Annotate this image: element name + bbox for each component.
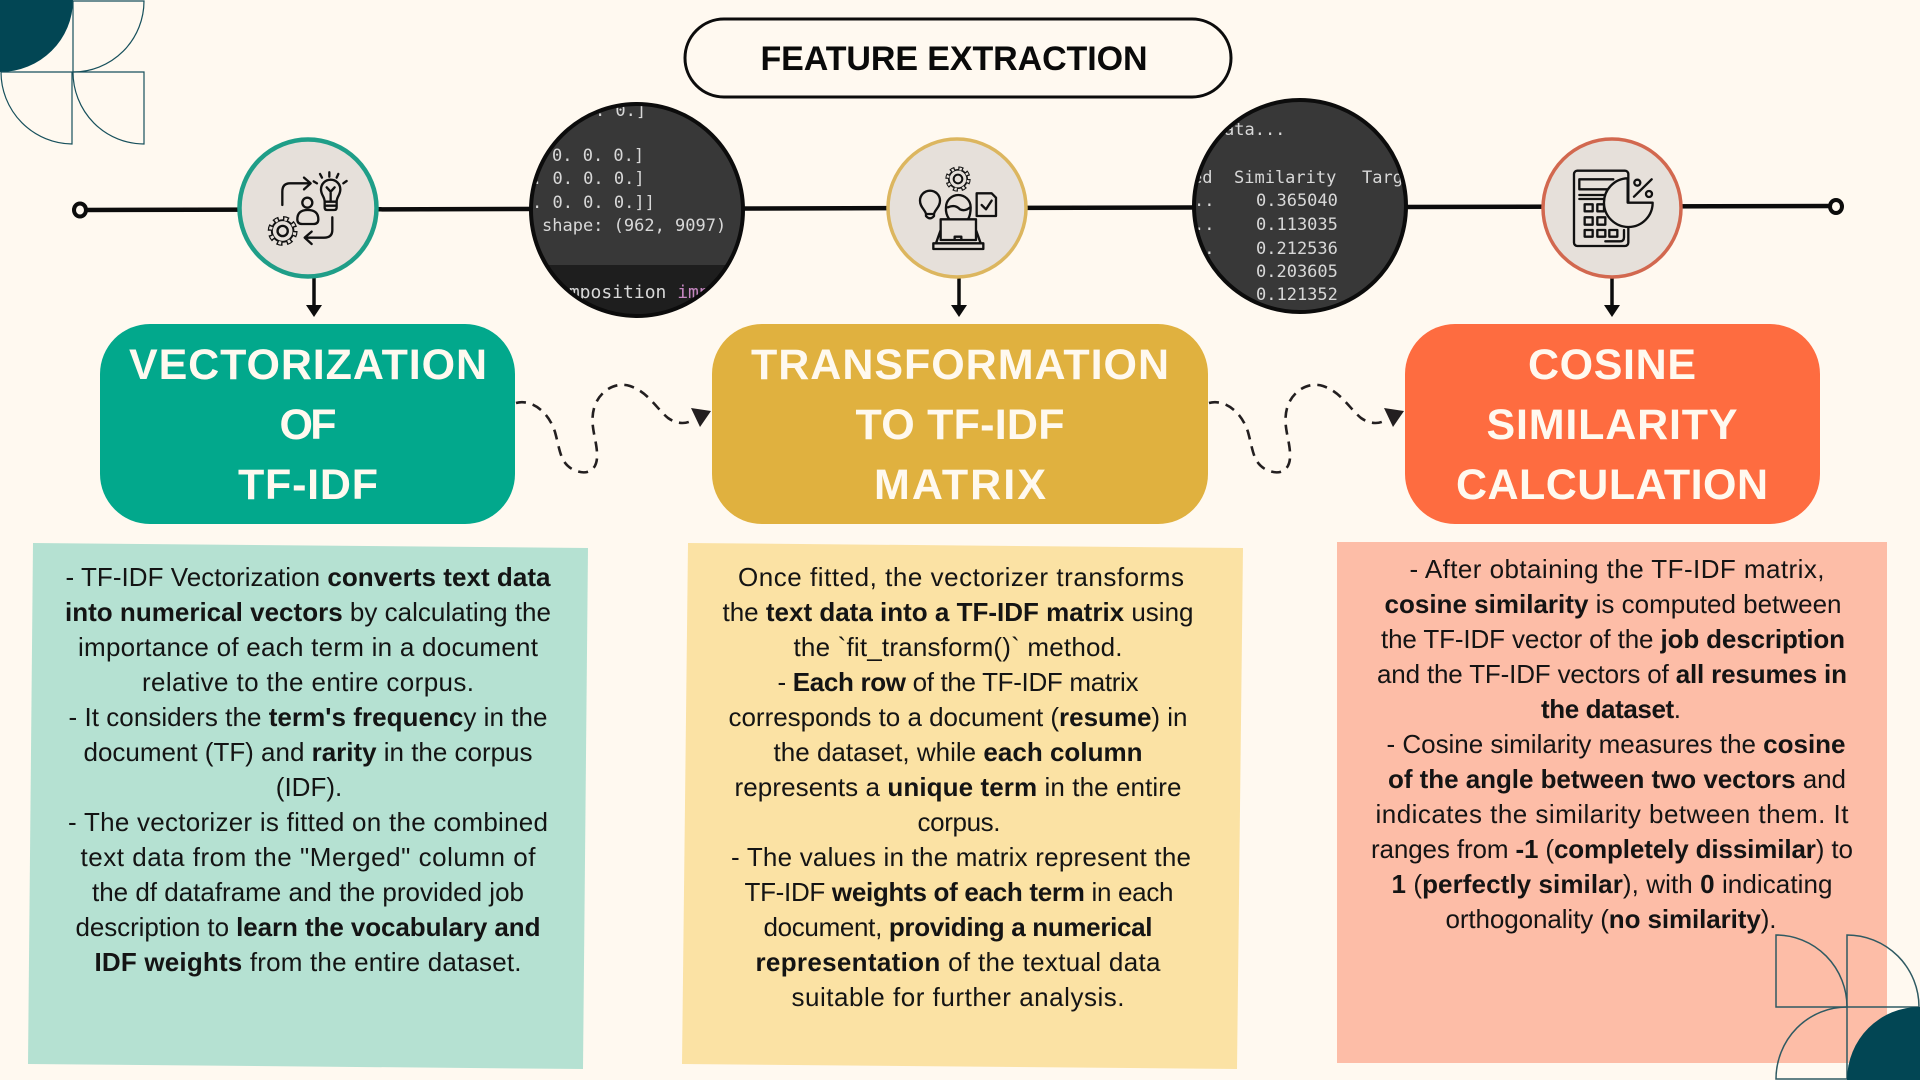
screenshot circle: similarity output: 0.212536	[1256, 239, 1338, 259]
screenshot circle: similarity output: 0.203605	[1256, 262, 1338, 282]
panel: transformation description: the dataset, while each column	[774, 737, 1142, 767]
panel: cosine description: cosine similarity is computed between	[1384, 589, 1842, 619]
panel: vectorization description: description to learn the vocabulary and	[76, 912, 540, 942]
screenshot circle: similarity output: 0.365040	[1256, 191, 1338, 211]
screenshot circle: matrix shape output	[529, 102, 745, 318]
timeline	[74, 200, 1842, 216]
panel: cosine heading: SIMILARITY	[1486, 401, 1738, 449]
panel: vectorization heading	[100, 324, 515, 524]
title: FEATURE EXTRACTION	[760, 40, 1148, 78]
panel: transformation description: - The values in the matrix represent the	[731, 842, 1191, 872]
icon: transformation circle	[888, 139, 1026, 277]
panel: transformation heading: TRANSFORMATION	[751, 341, 1169, 389]
decoration: top-left quarter circles	[0, 0, 144, 144]
panel: vectorization description: (IDF).	[276, 772, 342, 802]
panel: cosine heading: COSINE	[1528, 341, 1696, 389]
screenshot circle: similarity output: Targ	[1362, 168, 1403, 188]
screenshot circle: similarity output: ed	[1192, 168, 1212, 188]
panel: vectorization description: into numerical vectors by calculating the	[65, 597, 551, 627]
icon: vectorization circle	[240, 140, 376, 276]
panel: cosine description: of the angle between two vectors and	[1388, 764, 1846, 794]
title	[685, 19, 1231, 97]
arrow: circle 3 to heading	[1604, 278, 1620, 317]
panel: vectorization description: IDF weights from the entire dataset.	[94, 947, 522, 977]
screenshot circle: matrix shape output: omposition imp	[558, 282, 710, 303]
screenshot circle: matrix shape output: 0. 0. 0.]	[552, 146, 644, 166]
screenshot circle: similarity output: Similarity	[1234, 168, 1336, 188]
panel: cosine heading: CALCULATION	[1456, 461, 1768, 509]
icon: cosine circle	[1543, 139, 1681, 277]
screenshot circle: matrix shape output: shape: (962, 9097)	[542, 216, 726, 236]
panel: transformation heading	[712, 324, 1208, 524]
screenshot circle: similarity output: ..	[1194, 191, 1214, 211]
screenshot circle: matrix shape output: . 0. 0. 0.]]	[532, 193, 655, 213]
panel: transformation description: TF-IDF weights of each term in each	[744, 877, 1174, 907]
panel: cosine description: and the TF-IDF vectors of all resumes in	[1377, 659, 1847, 689]
panel: vectorization description: document (TF) and rarity in the corpus	[84, 737, 532, 767]
arrow: wavy from vectorization to transformation	[516, 385, 711, 472]
panel: vectorization description: the df dataframe and the provided job	[92, 877, 524, 907]
panel: vectorization heading: OF	[280, 401, 336, 449]
panel: vectorization description: - The vectorizer is fitted on the combined	[68, 807, 548, 837]
panel: cosine description: the TF-IDF vector of the job description	[1381, 624, 1845, 654]
arrow: circle 1 to heading	[306, 278, 322, 317]
panel: transformation description: represents a unique term in the entire	[734, 772, 1182, 802]
screenshot circle: similarity output	[1192, 100, 1406, 312]
panel: vectorization description: - It considers the term's frequency in the	[68, 702, 548, 732]
panel: transformation description: Once fitted, the vectorizer transforms	[738, 562, 1184, 592]
panel: cosine description: the dataset.	[1541, 694, 1681, 724]
screenshot circle: similarity output: ..	[1194, 215, 1214, 235]
panel: transformation description: the text data into a TF-IDF matrix using	[722, 597, 1194, 627]
panel: transformation description: document, providing a numerical	[764, 912, 1152, 942]
arrow: circle 2 to heading	[951, 278, 967, 317]
panel: vectorization description: relative to the entire corpus.	[142, 667, 474, 697]
screenshot circle: similarity output: ..	[1194, 239, 1214, 259]
screenshot circle: similarity output: 0.121352	[1256, 285, 1338, 305]
panel: transformation description: suitable for further analysis.	[792, 982, 1124, 1012]
panel: cosine description: orthogonality (no similarity).	[1446, 904, 1776, 934]
panel: transformation description: the `fit_transform()` method.	[794, 632, 1122, 662]
panel: cosine description: - After obtaining the TF-IDF matrix,	[1410, 554, 1824, 584]
panel: transformation heading: TO TF-IDF	[856, 401, 1064, 449]
panel: cosine heading	[1405, 324, 1820, 524]
panel: cosine description: - Cosine similarity measures the cosine	[1386, 729, 1846, 759]
panel: vectorization heading: VECTORIZATION	[129, 341, 487, 389]
decoration: bottom-right quarter circles	[1776, 935, 1920, 1080]
panel: transformation description: corpus.	[918, 807, 1000, 837]
panel: vectorization heading: TF-IDF	[238, 461, 378, 509]
panel: cosine description	[1337, 542, 1887, 1063]
arrow: wavy from transformation to cosine	[1209, 385, 1404, 472]
panel: transformation description: - Each row of the TF-IDF matrix	[778, 667, 1138, 697]
screenshot circle: similarity output: 0.113035	[1256, 215, 1338, 235]
panel: vectorization description: text data from the "Merged" column of	[80, 842, 536, 872]
screenshot circle: matrix shape output: . 0. 0. 0.]	[532, 169, 645, 189]
panel: cosine description: ranges from -1 (completely dissimilar) to	[1371, 834, 1853, 864]
panel: transformation heading: MATRIX	[874, 461, 1046, 509]
panel: transformation description: corresponds to a document (resume) in	[728, 702, 1188, 732]
panel: cosine description: indicates the similarity between them. It	[1376, 799, 1849, 829]
panel: vectorization description: - TF-IDF Vectorization converts text data	[66, 562, 551, 592]
panel: transformation description	[682, 543, 1243, 1069]
screenshot circle: similarity output: ata...	[1224, 120, 1285, 140]
panel: cosine description: 1 (perfectly similar), with 0 indicating	[1392, 869, 1832, 899]
panel: vectorization description	[28, 543, 588, 1069]
panel: transformation description: representation of the textual data	[756, 947, 1161, 977]
screenshot circle: matrix shape output: 0. 0. 0.]	[554, 101, 646, 121]
panel: vectorization description: importance of each term in a document	[78, 632, 539, 662]
